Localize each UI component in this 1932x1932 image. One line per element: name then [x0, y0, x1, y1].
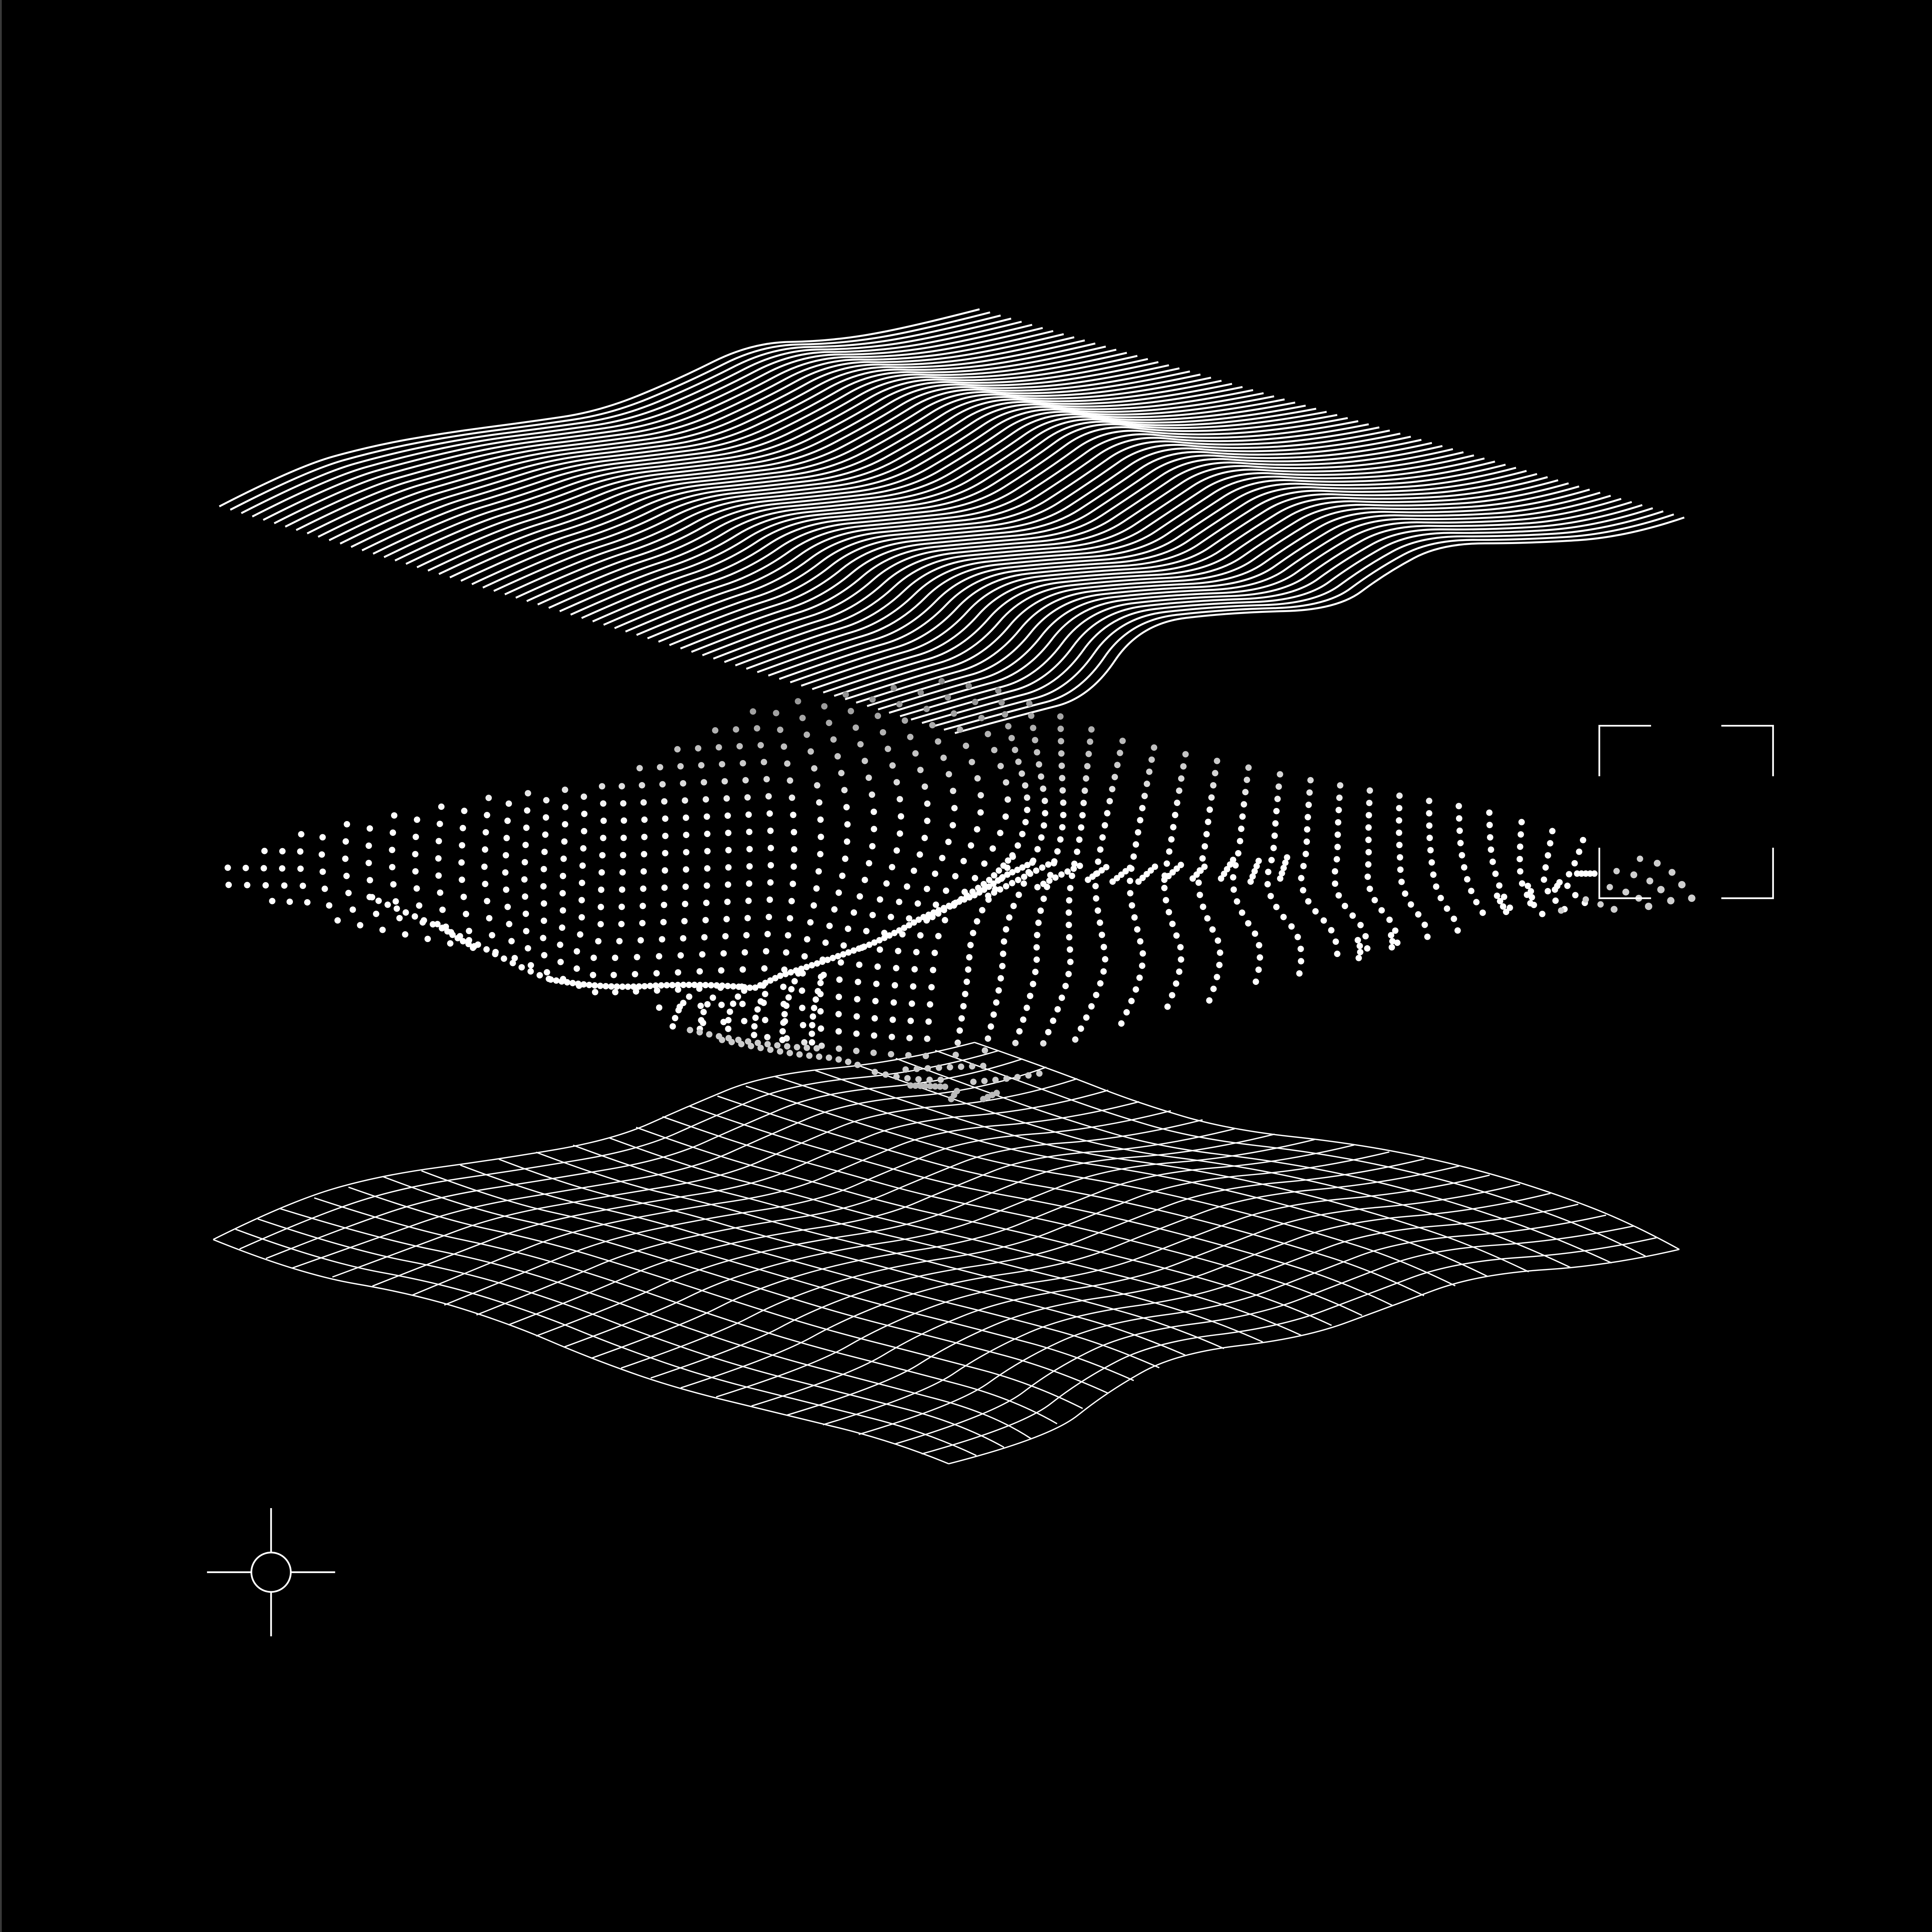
top surface: wave lines [219, 309, 1684, 733]
dot columns [228, 678, 1593, 1062]
bottom surface: wire mesh [213, 1043, 1679, 1464]
middle surface: dot field [228, 678, 1696, 1099]
dense white dot bands [370, 850, 1597, 1043]
icon: corner bracket frame [1599, 726, 1773, 898]
grey near-edge dots [690, 1030, 1047, 1099]
icon: crosshair [207, 1508, 335, 1636]
right tip grey dots [1558, 855, 1696, 914]
